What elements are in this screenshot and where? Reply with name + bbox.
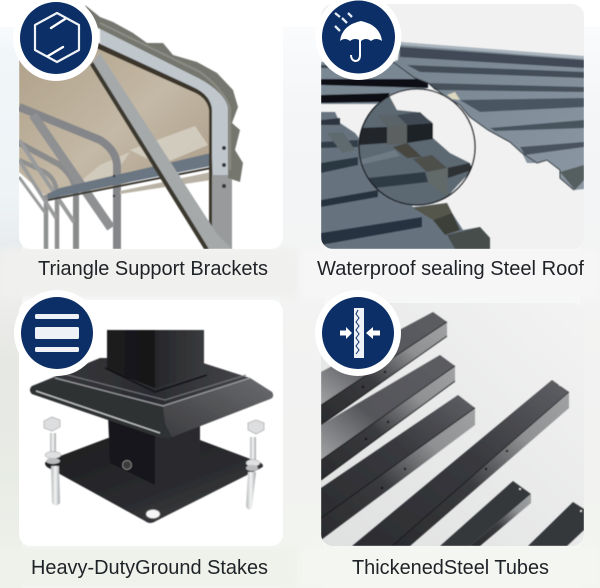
icon: stacked bars (14, 290, 100, 376)
tube 6 (528, 502, 584, 546)
upper post (107, 330, 155, 388)
tube 3 (321, 395, 475, 540)
panel: thickened steel tubes (321, 303, 584, 546)
base plate (45, 438, 263, 523)
crossbeam (47, 153, 211, 199)
label: thickened steel tubes: ThickenedSteel Tubes (352, 557, 549, 579)
icon: compression arrows (315, 290, 401, 376)
panel: triangle support brackets (19, 0, 283, 249)
tube 2 (321, 355, 455, 480)
main upper roof sheet (393, 42, 584, 190)
rear frames (19, 107, 117, 249)
tube 1 (321, 312, 447, 425)
label: heavy-duty ground stakes: Heavy-DutyGround Stakes (31, 557, 268, 579)
rear diagonal braces (33, 115, 111, 228)
lower-left roof sheet (321, 112, 490, 249)
left anchor bolt (44, 417, 61, 506)
panel: heavy-duty ground stakes (19, 300, 283, 546)
corrugated roof edge (85, 5, 243, 182)
label: triangle support brackets: Triangle Support Brackets (38, 258, 268, 280)
panel: waterproof steel roof (321, 4, 584, 249)
icon: umbrella and rain (316, 0, 402, 80)
front frame (100, 29, 228, 176)
tube 4 (352, 380, 569, 546)
label: waterproof sealing steel roof: Waterproof sealing Steel Roof (317, 258, 584, 280)
front diagonal brace (90, 53, 232, 249)
back sheet left (321, 62, 429, 104)
icon: hexagon brackets (13, 0, 99, 81)
flange plate (30, 358, 273, 438)
bolts (222, 146, 226, 150)
tube 5 (440, 481, 531, 546)
lower post (108, 415, 155, 485)
roof underside (19, 30, 212, 198)
right anchor bolt (246, 420, 264, 510)
magnifier lens (359, 89, 475, 207)
